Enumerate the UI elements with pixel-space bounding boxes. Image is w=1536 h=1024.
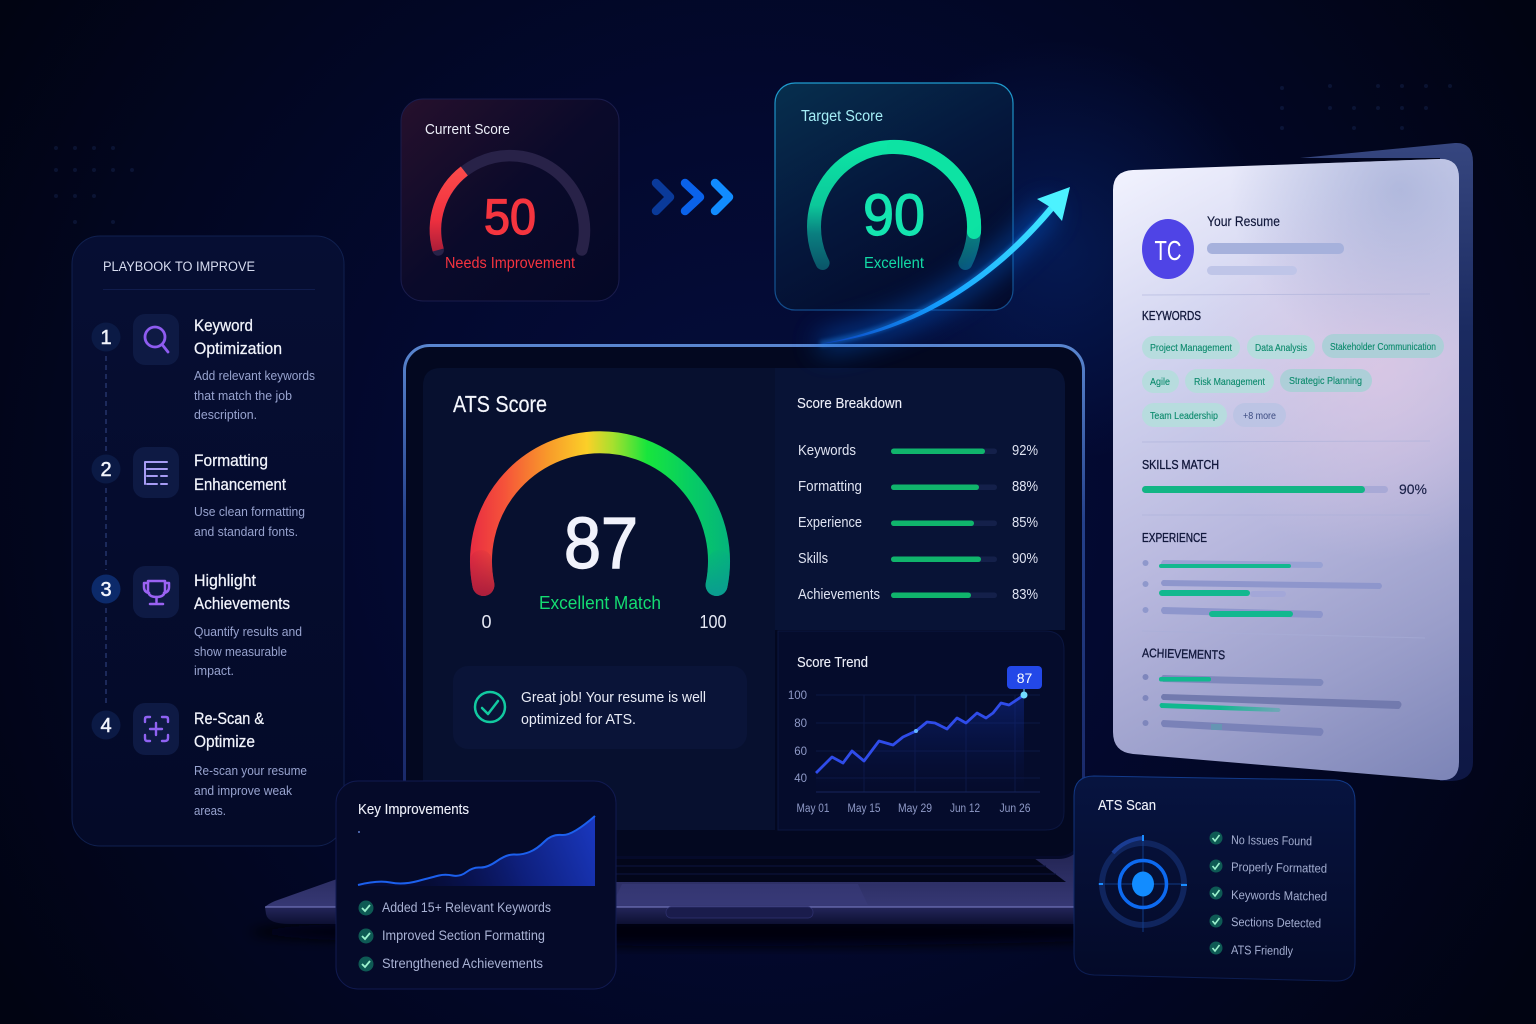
section: skills match: 90% [1399,482,1427,497]
keyword chips: Data Analysis [1255,342,1307,354]
avatar: TC [1154,235,1182,266]
title: Optimization [194,340,282,358]
chart: current gauge [435,156,584,250]
heading: Score Breakdown: Score Breakdown [797,395,902,412]
item: Properly Formatted [1231,860,1327,876]
item: Keywords Matched [1231,888,1327,904]
description: Quantify results and [194,624,302,639]
arrow: growth [820,187,1070,344]
chart: line chart [788,689,1040,815]
label: target score: Target Score [801,108,883,125]
keyword chips: Strategic Planning [1289,375,1362,387]
chart: line chart: Jun 26 [1000,803,1030,815]
row: Experience 85%: Experience [798,515,862,531]
title: Enhancement [194,476,286,494]
value: 90: 90 [863,183,925,248]
row: Skills 90%: 90% [1012,551,1038,567]
chart: line chart: May 01 [796,803,830,815]
resume tint [1113,159,1459,780]
step 2: 2 [100,459,112,481]
row: Formatting 88%: 88% [1012,479,1038,495]
description: and improve weak [194,783,292,798]
laptop base deck [250,853,1200,946]
description: impact. [194,663,234,678]
section: experience [1142,531,1382,618]
section: keywords: KEYWORDS [1142,309,1201,323]
chart: target gauge [814,147,974,263]
section: achievements: ACHIEVEMENTS [1142,646,1225,662]
item: ATS Friendly [1231,943,1294,958]
resume tint blue [1113,159,1459,780]
title: Re-Scan & [194,710,264,728]
step 2 [92,447,305,539]
icon: trophy [133,566,179,618]
title: Keyword [194,317,253,335]
panel: ATS score [423,368,775,830]
icon: radar [1098,835,1187,932]
row: Keywords 92% [798,443,1038,459]
resume sheet [1113,159,1459,780]
keyword chips: Risk Management [1194,376,1265,388]
heading: Score Trend: Score Trend [797,655,868,671]
section: achievements [1142,646,1402,736]
heading: ATS Scan: ATS Scan [1098,797,1156,814]
chart: line chart: 100 [788,690,807,702]
resume back sheet [1300,143,1473,781]
title: Formatting [194,452,268,470]
gauge min: 0 [481,612,492,632]
chart: line chart: May 29 [898,803,932,815]
panel: target score [775,83,1013,310]
chart: line chart: 80 [794,718,807,730]
panel: score breakdown [775,368,1065,630]
panel: current score [401,99,619,301]
name placeholder [1207,243,1344,275]
section: skills match: SKILLS MATCH [1142,458,1219,472]
item: achievements: Strengthened Achievements [382,956,543,971]
label: current score: Current Score [425,121,510,138]
resume title: Your Resume [1207,213,1280,229]
row: Achievements 83%: 83% [1012,587,1038,603]
keyword chips: +8 more [1243,410,1276,422]
callout text: Great job! Your resume is well [521,689,706,706]
keyword chips: Agile [1150,376,1170,388]
description: areas. [194,803,226,818]
title: Achievements [194,595,290,613]
badge: 87 [1007,666,1042,689]
chart: line chart: Jun 12 [950,803,980,815]
description: description. [194,407,257,422]
chart: main gauge [481,442,719,585]
title: Optimize [194,733,255,751]
description: Add relevant keywords [194,368,315,383]
row: Experience 85%: 85% [1012,515,1038,531]
heading: ATS Score: ATS Score [453,391,547,417]
section: skills match [1142,458,1427,497]
row: Formatting 88% [798,479,1038,495]
row: Achievements 83% [798,587,1038,603]
step 3 [92,566,302,678]
step 1: 1 [100,327,112,349]
description: and standard fonts. [194,524,298,539]
row: Achievements 83%: Achievements [798,587,880,603]
keyword chips: Team Leadership [1150,410,1218,422]
description: show measurable [194,644,287,659]
heading: playbook: PLAYBOOK TO IMPROVE [103,259,255,274]
timeline connector [105,356,107,706]
status: excellent: Excellent [864,255,925,272]
badge: 87: 87 [1017,670,1032,686]
gauge max: 100 [700,612,726,632]
item: Sections Detected [1231,915,1321,931]
icon: format list [133,447,179,498]
description: Re-scan your resume [194,763,307,778]
title: Highlight [194,572,256,590]
item: added keywords: Added 15+ Relevant Keywords [382,900,551,915]
label: Excellent Match: Excellent Match [539,593,661,613]
item: No Issues Found [1231,833,1312,848]
value: 50: 50 [484,189,536,245]
avatar [1142,219,1194,279]
panel: ATS scan [1074,776,1355,981]
icon: magnifier [133,314,179,365]
callout: great job [453,666,747,749]
arrows: chevrons [656,183,729,211]
row: Keywords 92%: 92% [1012,443,1038,459]
icon: rescan [133,703,179,755]
panel: resume [1113,143,1473,781]
laptop screen [404,346,1084,858]
heading: key improvements: Key Improvements [358,802,469,818]
chart: area chart [358,816,595,886]
row: Formatting 88%: Formatting [798,479,862,495]
row: Skills 90%: Skills [798,551,828,567]
keyword chips: Project Management [1150,342,1232,354]
status: needs improvement: Needs Improvement [445,255,576,272]
callout text: optimized for ATS. [521,711,636,728]
keyword chips: Stakeholder Communication [1330,341,1436,353]
step 1 [92,314,315,422]
section: keywords [1142,309,1444,427]
checklist [1210,832,1327,958]
row: Keywords 92%: Keywords [798,443,856,459]
step 3: 3 [100,579,112,601]
chart: line chart: 40 [794,773,807,785]
panel: score trend [778,631,1064,830]
laptop [250,346,1200,946]
keyword chips [1142,334,1444,427]
panel: playbook [72,236,344,846]
step 4: 4 [100,715,112,737]
panel: key improvements [336,781,616,989]
chart: line chart: May 15 [848,803,880,815]
section: experience: EXPERIENCE [1142,531,1207,545]
item: section formatting: Improved Section Formatting [382,928,545,943]
row: Experience 85% [798,515,1038,531]
row: Skills 90% [798,551,1038,567]
description: that match the job [194,388,292,403]
chart: line chart: 60 [794,746,807,758]
step 4 [92,703,307,818]
icon: check circle [475,692,505,722]
description: Use clean formatting [194,504,305,519]
score value 87: 87 [564,504,638,584]
